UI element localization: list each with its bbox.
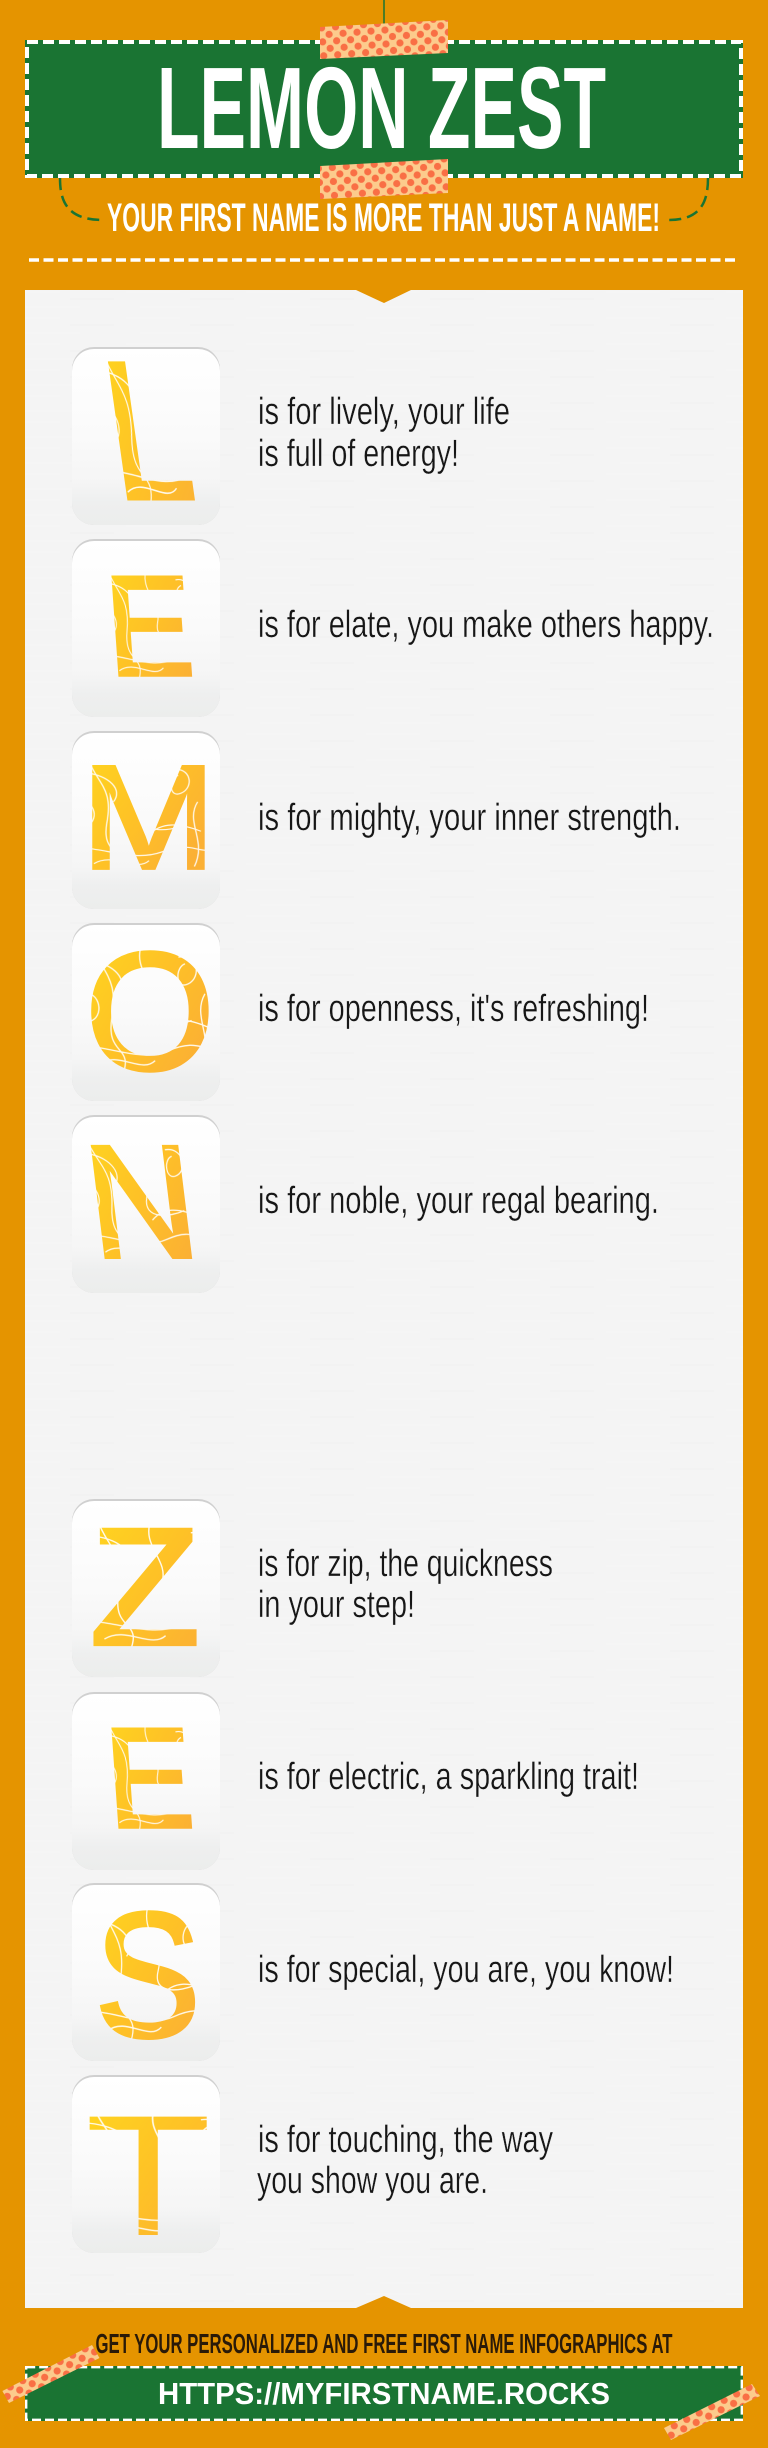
row: T [72, 2075, 553, 2272]
text: L line 2: is full of energy! [258, 433, 459, 475]
row: M [72, 731, 681, 909]
letter M: M [81, 735, 216, 899]
url: HTTPS://MYFIRSTNAME.ROCKS [158, 2376, 610, 2411]
text: T line 1: is for touching, the way [258, 2119, 553, 2161]
tape: top [320, 20, 448, 59]
letter E second: E [100, 1699, 198, 1857]
connector: left dashed curve [60, 178, 103, 220]
tape: footer left [2, 2345, 99, 2403]
letter L: L [92, 321, 204, 540]
title banner [25, 40, 743, 178]
footer banner [25, 2366, 743, 2421]
row: O [72, 919, 649, 1105]
text: N: is for noble, your regal bearing. [258, 1180, 659, 1222]
row: E [72, 539, 714, 717]
row: Z [72, 1493, 553, 1679]
text: Z line 1: is for zip, the quickness [258, 1543, 553, 1585]
row: E second [72, 1692, 639, 1870]
letter O: O [85, 919, 215, 1105]
letter T: T [85, 2080, 211, 2272]
letter E: E [100, 547, 198, 705]
row: L [72, 321, 510, 540]
top hanging line [383, 0, 385, 24]
row: S [72, 1876, 674, 2074]
letter N: N [76, 1112, 206, 1291]
text: E second: is for electric, a sparkling trait! [258, 1756, 639, 1798]
panel: letters [25, 290, 743, 2308]
text: O: is for openness, it's refreshing! [258, 988, 649, 1030]
tape: footer right [664, 2384, 760, 2440]
text: Z line 2: in your step! [258, 1584, 415, 1626]
row: N [72, 1112, 659, 1293]
text: L line 1: is for lively, your life [258, 391, 510, 433]
letter Z: Z [90, 1493, 200, 1679]
tape: bottom of title [320, 159, 448, 199]
connector: right dashed curve [669, 178, 708, 220]
letter S: S [95, 1876, 200, 2074]
text: T line 2: you show you are. [257, 2160, 488, 2202]
